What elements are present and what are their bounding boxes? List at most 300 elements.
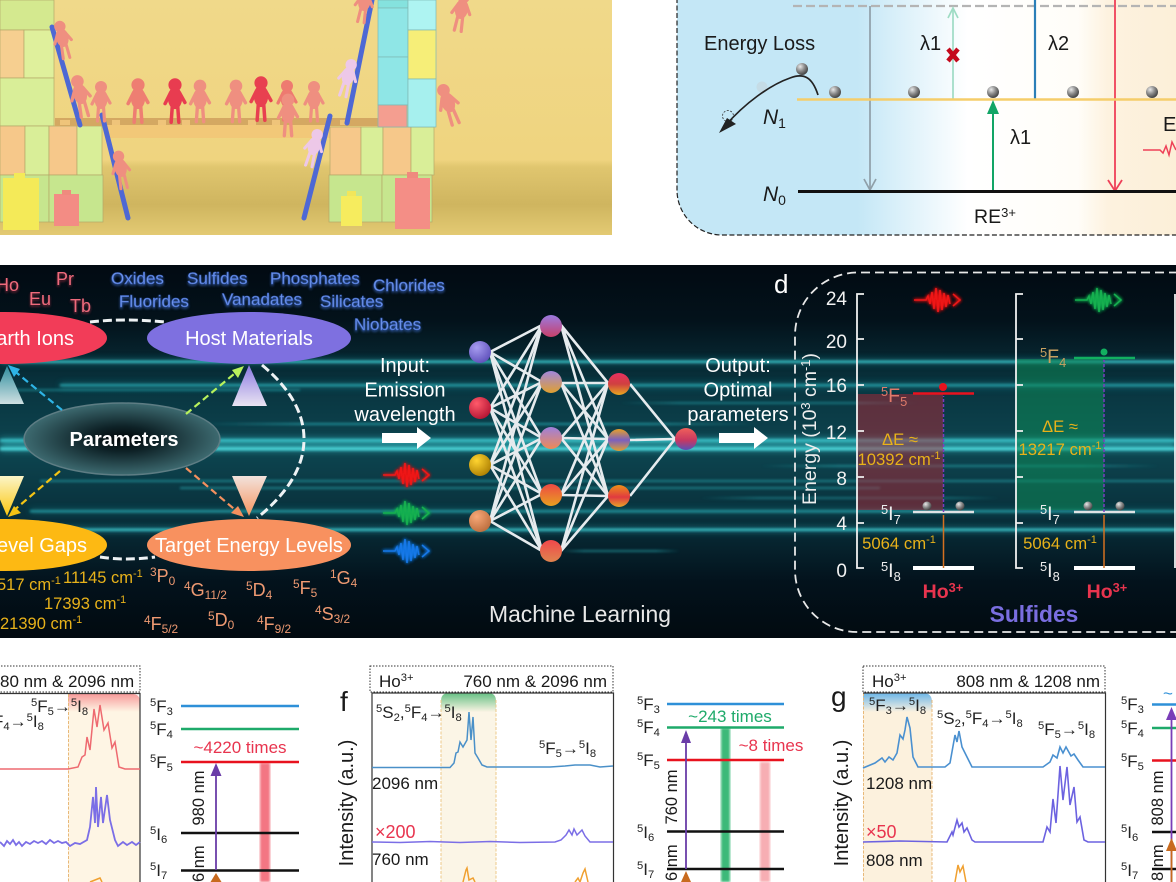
parameters ellipse [24,403,220,475]
term labels f: 5 [637,823,643,835]
energy level ladder f [667,704,784,882]
panel g: spectra [831,666,1176,882]
transition labels: 5 [71,697,77,709]
title box: Ho [872,672,894,691]
transition label: 5 [376,703,382,715]
panel e: spectra [0,666,299,882]
transition label: S [943,709,955,728]
target level terms: 4 [266,588,273,602]
axis title intensity: Intensity (a.u.) [336,740,358,866]
gap values [857,417,1102,553]
ellipse: host materials [147,312,351,364]
term labels g: 5 [1138,761,1144,773]
coloured bricks [3,172,430,230]
plot frame [372,693,614,882]
term labels f: 5 [637,695,643,707]
energy gap values: 21390 cm [0,615,72,633]
term labels g: I [1127,861,1132,880]
label: N1: 1 [778,115,786,131]
term labels e: 5 [150,861,156,873]
enhancement label e: ~4220 times [193,738,287,757]
panel label d: d [774,269,788,299]
neural network [469,315,697,562]
label: lambda 1 upper: λ1 [920,33,941,55]
transition label: → [1061,720,1078,739]
purple spectrum [863,766,1105,842]
enhancement green: ~243 times [688,707,772,726]
term labels g [1121,695,1144,882]
transition label: 5 [1038,720,1044,732]
output arrow [719,427,768,449]
Ho3+ label column 2: Ho [1087,581,1113,603]
term labels f: 4 [654,727,660,739]
title box: 3+ [894,672,907,684]
triangle: target levels [232,476,267,516]
transition label: I [1084,720,1089,739]
transition label: 8 [455,712,462,724]
term labels e: 5 [150,697,156,709]
column 2 Ho levels [1074,348,1135,568]
term labels column 2 [1040,345,1066,584]
term labels column 2: 4 [1059,355,1066,370]
label: lambda 1 lower: λ1 [1010,127,1031,149]
term labels column 1: 7 [894,512,901,527]
output label: Optimal [704,380,772,402]
transition label: → [892,696,909,715]
transition labels: → [54,697,71,716]
axis 1 [857,294,864,568]
machine learning title: Machine Learning [489,601,671,627]
target level terms: 1 [330,567,337,581]
term labels g: 5 [1121,719,1127,731]
energy gap values: 11145 cm [63,569,133,587]
dashed white cycle arc [90,320,304,559]
red spectrum [0,705,140,769]
transition label partial: I [33,712,38,731]
Ho3+ label column 2: 3+ [1113,580,1127,595]
term labels g: 5 [1121,752,1127,764]
term labels column 2: 7 [1053,512,1060,527]
transition labels: 8 [82,706,88,718]
term labels g: 5 [1121,861,1127,873]
dashed inner frame [795,272,1176,632]
input label: Emission [364,380,446,402]
target level terms: 4 [184,579,191,593]
target level terms: 4 [315,603,322,617]
target level terms: 5 [293,577,300,591]
green excitation arrow [987,100,999,190]
term labels f: 5 [637,860,643,872]
transition label partial: 4 [3,721,10,733]
transition label: → [427,703,444,722]
host material labels: Niobates [354,315,421,334]
pump label partial: 6 nm [663,844,681,881]
transition label: 4 [421,712,427,724]
output label: parameters [687,404,789,426]
plot frame [863,693,1106,882]
orange spectrum [955,865,966,882]
rare earth labels: Eu [29,289,51,309]
target level terms: 5 [311,586,318,600]
transition label: F [1044,720,1055,739]
term labels f: I [643,823,648,842]
N1 level [797,98,1176,101]
term labels column 2: 5 [1040,502,1047,517]
label: N1: N [763,106,778,129]
transition label: , [961,709,966,728]
target level terms: 0 [228,618,235,632]
label x50: ×50 [866,822,897,842]
term labels column 2: I [1047,503,1053,525]
panel label f: f [340,686,348,717]
energy gap values: -1 [116,594,126,606]
term labels f: 7 [648,869,654,881]
target level terms: 5/2 [162,622,178,636]
term labels f [637,695,660,881]
dashed arrows from parameters [12,369,240,514]
target level terms: F [264,614,275,634]
axis 3 [1174,294,1176,568]
transition label: , [400,703,405,722]
term labels column 2: F [1047,346,1059,368]
transition label: I [451,703,455,722]
transition label: F [875,696,886,715]
orange spectrum [463,868,475,882]
target level terms: F [151,614,162,634]
gap values: 5064 cm [1023,534,1087,553]
transition label: 5 [556,748,562,760]
input waves [383,463,429,563]
term labels e: I [156,825,161,844]
target level terms: 4 [257,613,264,627]
transition label: 5 [405,703,411,715]
term labels e: 7 [161,870,167,882]
target level terms: D [215,610,228,630]
label: E cut off: E [1163,114,1176,136]
host material labels: Sulfides [187,269,247,288]
energy loss curve arrow [719,76,818,133]
title box: Ho [379,672,401,691]
title box: 760 nm & 2096 nm [463,672,607,691]
term labels e: 5 [150,753,156,765]
term labels f: 5 [654,760,660,772]
target level terms: 0 [169,574,176,588]
target level terms: G [191,580,205,600]
target level terms: 4 [144,613,151,627]
panel: machine learning dark band [0,265,1176,638]
gap values: -1 [926,534,936,546]
cream highlight [68,694,140,882]
label 760: 760 nm [372,850,429,869]
pump label partial: 8 nm [1149,844,1167,881]
title box: 3+ [401,672,414,684]
transition label: F [972,709,982,728]
transition label partial: 8 [38,721,44,733]
label: RE3+: 3+ [1001,205,1016,220]
term labels column 1: 5 [881,502,888,517]
ellipse: level gaps [0,519,107,571]
column 1 Ho levels [913,383,974,568]
label: lambda 2: λ2 [1048,33,1069,55]
blue spectrum [863,717,1105,768]
gap values: ΔE ≈ [1042,417,1078,436]
transition label: I [915,696,920,715]
waves on top of columns [914,288,1121,312]
term labels f: 5 [637,718,643,730]
gap values: 5064 cm [862,534,926,553]
target level terms: 9/2 [275,622,291,636]
energy gap values: -1 [72,614,82,626]
transition label: I [1012,709,1016,728]
term labels column 1: 5 [881,384,888,399]
target level terms [144,565,358,636]
term labels e: 5 [150,720,156,732]
pump label 808: 808 nm [1149,770,1167,826]
N0 level [798,190,1176,193]
transition label: 3 [886,705,892,717]
ellipse: target energy levels: Target Energy Levels [155,535,343,557]
axis title energy: 3 [798,402,813,410]
target level terms: D [253,580,266,600]
title box: 808 nm & 1208 nm [956,672,1100,691]
transition label: 5 [579,739,585,751]
gap values: -1 [1092,440,1102,452]
target level terms: F [300,578,311,598]
transition label: 8 [920,705,926,717]
ellipse: target energy levels [147,519,351,571]
transition label: I [585,739,590,758]
green gap shade [1016,359,1104,510]
ellipse: rare earth ions [0,312,107,364]
purple spectrum [372,829,613,842]
host material labels: Chlorides [373,276,445,295]
axis tick labels: 8 [836,469,847,490]
transition label: S [382,703,394,722]
term labels g: F [1127,752,1138,771]
enhancement red: ~8 times [739,736,803,755]
term labels g: F [1127,719,1138,738]
term labels e: 4 [167,729,173,741]
transition labels: 5 [31,697,37,709]
transition label: → [988,709,1005,728]
term labels column 2: 5 [1040,345,1047,360]
energy gap values: -1 [51,575,61,587]
label: N0: N [763,183,778,206]
term labels column 1: I [888,560,894,582]
cyan tower [378,0,436,127]
host material labels [111,269,445,334]
input label: wavelength [353,404,456,426]
energy gap values: -1 [133,568,143,580]
axis title intensity: Intensity (a.u.) [831,740,853,866]
label 1208: 1208 nm [866,774,932,793]
target level terms: P [157,566,169,586]
term labels column 1: 5 [900,394,907,409]
term labels e: 5 [167,762,173,774]
rare earth labels: Pr [56,269,74,289]
Ho3+ label column 1: 3+ [949,580,963,595]
glowing streak background [0,360,1176,552]
red emission arrow [1108,0,1122,191]
title box [370,666,613,692]
target level terms: 11/2 [205,588,227,602]
axis tick labels: 16 [826,376,847,397]
climbing and standing figures [50,0,474,190]
term labels f: F [643,718,654,737]
transition label: 5 [1078,720,1084,732]
sulfides label: Sulfides [990,601,1078,627]
Ho3+ label column 1: Ho [923,581,949,603]
purple spectrum [0,787,140,846]
rare earth labels: Tb [70,296,91,316]
term labels column 1: F [888,385,900,407]
term labels f: 3 [654,704,660,716]
gap values: -1 [931,450,941,462]
label 808: 808 nm [866,851,923,870]
triangle: host materials [232,365,267,406]
host material labels: Oxides [111,269,164,288]
bridge deck [55,118,378,138]
grey decay arrow [864,6,876,190]
input label: Input: [380,355,430,377]
term labels g: 5 [1121,823,1127,835]
term labels f: I [643,860,648,879]
axis title energy: ) [799,353,821,360]
axis tick labels: 24 [826,289,847,310]
transition labels: F [37,697,48,716]
term labels g: 5 [1121,695,1127,707]
transition label: 5 [869,696,875,708]
red gap shade [857,394,943,510]
orange spectrum right [575,869,588,882]
target level terms: S [322,604,334,624]
term labels e: F [156,753,167,772]
label x200: ×200 [375,822,416,842]
host material labels: Phosphates [270,269,360,288]
target level terms: G [337,568,351,588]
label 2096: 2096 nm [372,774,438,793]
target level terms: 4 [351,576,358,590]
transition label: 5 [444,703,451,715]
pump label 760: 760 nm [663,769,681,825]
host material labels: Vanadates [222,290,302,309]
triangle: rare earth [0,366,24,404]
term labels g: 3 [1138,704,1144,716]
term labels column 1 [881,384,907,584]
term labels column 1: 8 [894,569,901,584]
panel f: spectra [336,666,803,882]
target level terms: 3 [150,565,157,579]
term labels e: F [156,697,167,716]
axis tick labels: 12 [826,423,847,444]
left green and orange block tower [0,0,103,222]
panel: energy loss level diagram [677,0,1176,235]
transition label partial: 5 [27,712,33,724]
gap values: 13217 cm [1018,440,1092,459]
electrons [722,63,1158,122]
term labels g: 4 [1138,728,1144,740]
transition label: → [562,739,579,758]
connections [490,325,675,551]
gap values: -1 [1087,534,1097,546]
transition label: 8 [1016,718,1023,730]
nodes [469,315,697,562]
term labels g: 6 [1132,832,1138,844]
axis title energy: cm [799,371,821,402]
transition label: F [411,703,421,722]
rare earth labels [0,269,91,316]
transition label: 5 [1055,729,1061,741]
term labels g: I [1127,823,1132,842]
pump label 980: 980 nm [190,770,208,826]
transition label: 8 [1089,729,1095,741]
transition labels: I [77,697,82,716]
term labels g: 7 [1132,870,1138,882]
transition label: 5 [909,696,915,708]
panel: block bridge scene [0,0,612,235]
target level terms: 5 [246,579,253,593]
label: RE3+: RE [974,206,1001,228]
energy level ladder e [181,706,299,882]
label: N0: 0 [778,192,786,208]
target level terms: 5 [208,609,215,623]
transition label: 5 [539,739,545,751]
term labels e: 3 [167,706,173,718]
axis title energy: Energy (10 [799,410,821,505]
axis tick labels: 4 [836,514,847,535]
term labels e [150,697,173,882]
transition label: 5 [1005,709,1012,721]
panel label g: g [831,681,847,712]
plot frame [0,694,140,882]
faded excitation arrow [948,8,958,99]
soft streak glow [0,359,1176,532]
term labels column 1: I [888,503,894,525]
term labels e: F [156,720,167,739]
title box [863,666,1105,692]
transition label: 5 [966,709,972,721]
axis title energy: -1 [798,360,813,371]
axis tick labels: 0 [836,561,847,582]
host material labels: Fluorides [119,292,189,311]
pump label partial: 6 nm [190,845,208,882]
term labels f: 5 [637,751,643,763]
red cross [948,49,958,61]
triangle: level gaps [0,476,24,516]
emission wave [1143,142,1176,155]
term labels column 1: 5 [881,559,888,574]
transition label: 5 [937,709,943,721]
host material labels: Silicates [320,292,383,311]
transition label partial: → [10,712,27,731]
transition labels: 5 [48,706,54,718]
ladders [52,0,372,218]
virtual level dashed line [793,5,1176,7]
target level terms: 3/2 [334,612,350,626]
term labels column 2: I [1047,560,1053,582]
term labels column 2: 5 [1040,559,1047,574]
transition label: 8 [590,748,596,760]
term labels f: F [643,751,654,770]
transition label: 4 [982,718,988,730]
energy gap values: 17393 cm [44,595,116,613]
transition label: F [545,739,556,758]
gap values: ΔE ≈ [882,430,918,449]
axis tick labels [826,289,847,582]
cream highlight [863,693,932,882]
blue spectrum [372,712,613,768]
term labels column 2: 8 [1053,569,1060,584]
